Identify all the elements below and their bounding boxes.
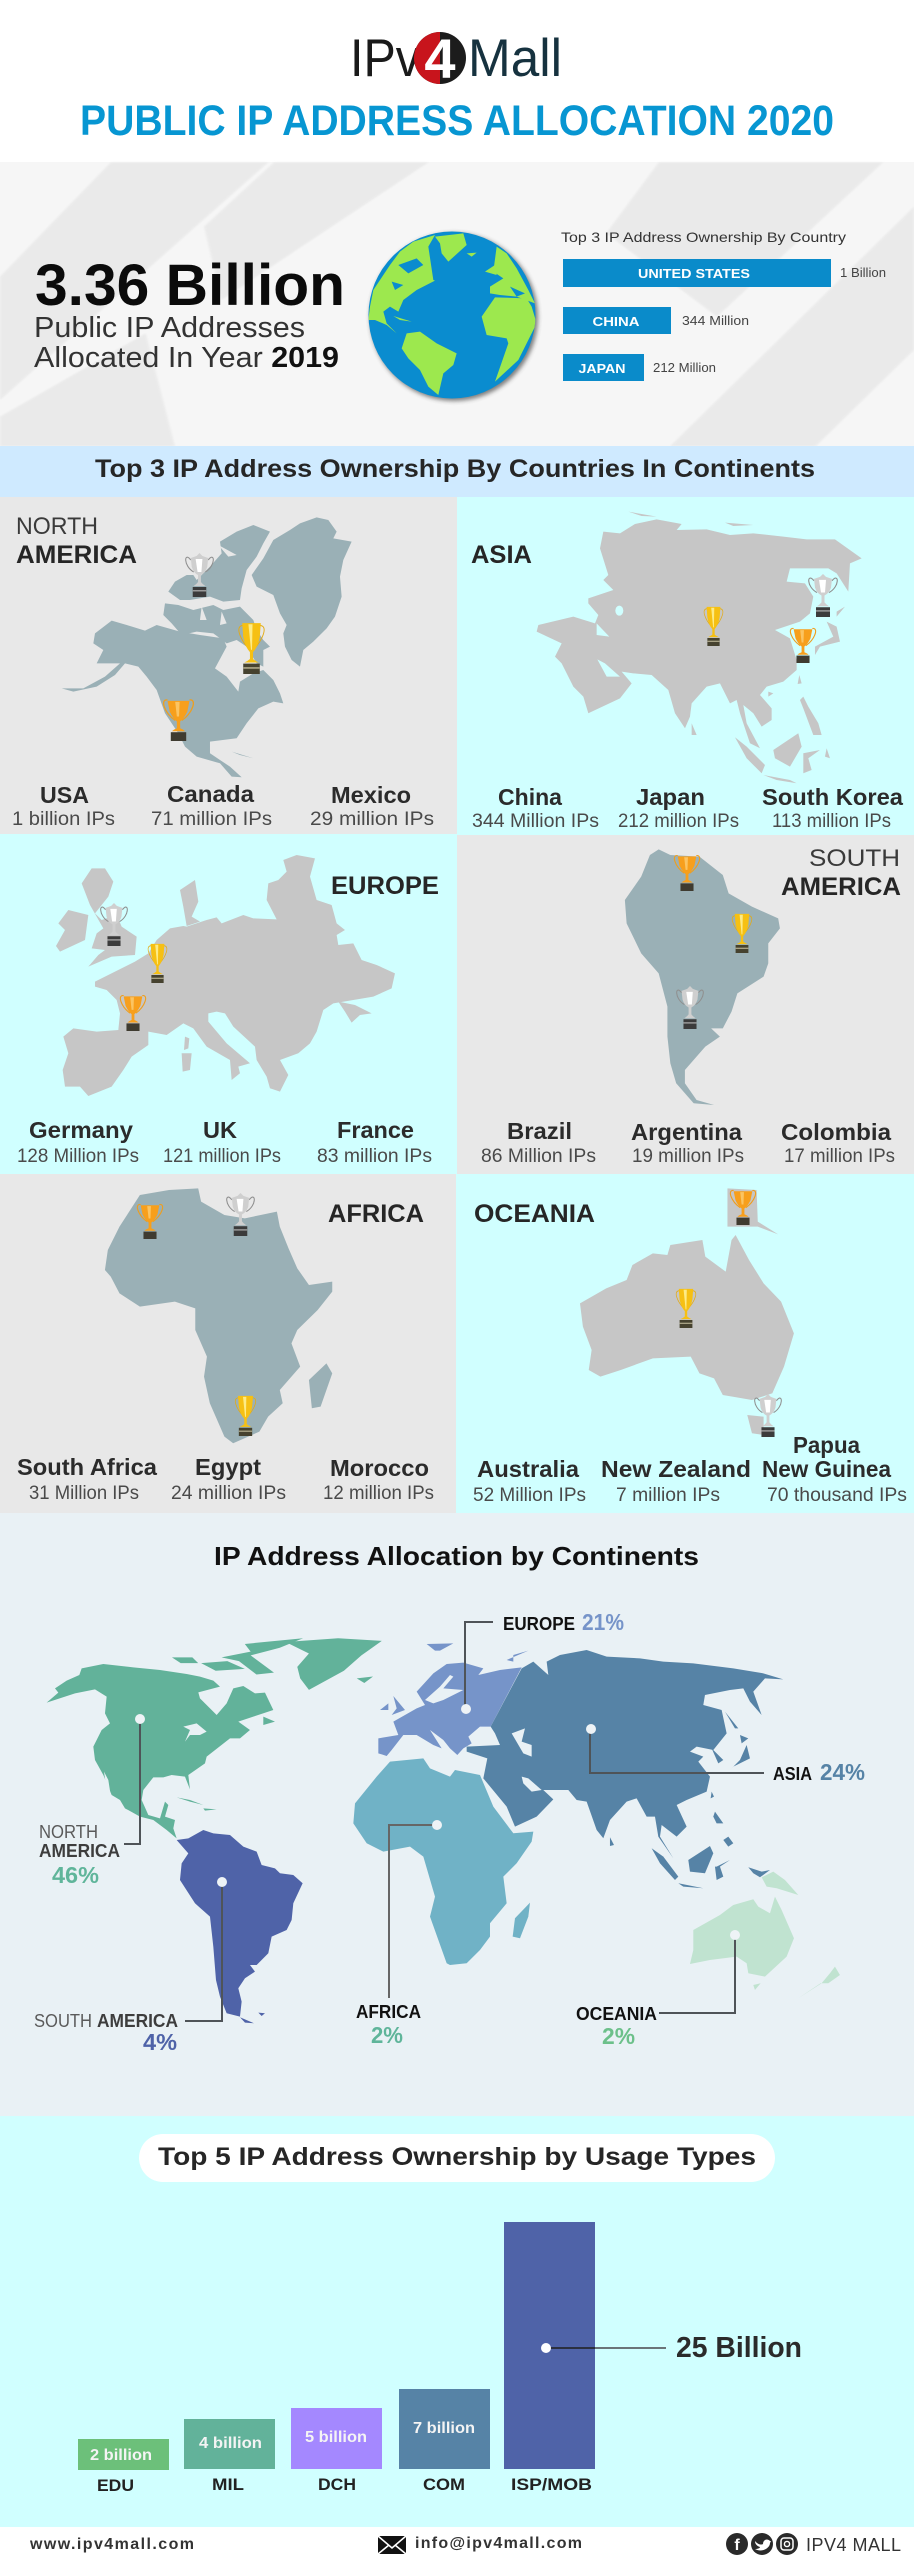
stat: China: China — [498, 784, 562, 810]
stat: Argentina: 19 million IPs — [632, 1146, 744, 1167]
stat: France — [317, 1117, 432, 1167]
big number: 3.36 Billion — [35, 253, 345, 318]
stat: South Korea: 113 million IPs — [772, 811, 891, 832]
bar: Japan: JAPAN — [578, 361, 626, 376]
stat: UK — [163, 1117, 281, 1167]
callout: Africa: 2% — [371, 2022, 403, 2048]
icons: social — [726, 2533, 798, 2555]
stat: Egypt: Egypt — [195, 1454, 261, 1480]
label: South America: SOUTH — [809, 845, 900, 872]
bar: EDU: 2 billion — [90, 2447, 152, 2464]
title: PUBLIC IP ADDRESS ALLOCATION 2020 — [80, 97, 834, 145]
bar: MIL: 4 billion — [199, 2435, 262, 2452]
callout: Europe: 21% — [582, 1609, 624, 1635]
icons: social: f — [734, 2537, 740, 2554]
stat: Australia: 52 Million IPs — [473, 1485, 586, 1506]
stat: Papua New Guinea: Papua — [793, 1432, 860, 1458]
trophies — [101, 903, 167, 1031]
bar: COM — [399, 2389, 490, 2494]
bar: United States — [563, 259, 886, 287]
label: North America: NORTH — [16, 513, 98, 540]
stat: Canada: 71 million IPs — [151, 809, 272, 830]
logo emblem: 4 — [424, 27, 456, 90]
map: Oceania — [580, 1188, 794, 1435]
email: info@ipv4mall.com — [415, 2535, 582, 2552]
bar: United States: UNITED STATES — [638, 266, 750, 281]
map: North America region — [47, 1638, 382, 1838]
panel: Africa — [0, 1174, 456, 1513]
stat: France: France — [337, 1117, 414, 1143]
stat: Argentina — [631, 1119, 744, 1167]
stat: Papua New Guinea: 70 thousand IPs — [767, 1485, 907, 1506]
callout: Oceania: 2% — [602, 2023, 635, 2049]
stat: South Africa: 31 Million IPs — [29, 1483, 139, 1504]
bar: DCH: 5 billion — [305, 2429, 367, 2446]
stat: Argentina: Argentina — [631, 1119, 742, 1145]
panel: North America — [0, 497, 457, 834]
stat: South Korea: South Korea — [762, 784, 903, 810]
callout: Oceania: OCEANIA — [576, 2004, 657, 2024]
stat: South Korea — [762, 784, 903, 832]
hero caption: Allocated In Year 2019 — [34, 342, 339, 374]
stat: Canada — [151, 781, 272, 830]
stat: Mexico: 29 million IPs — [310, 809, 434, 830]
icon: mail — [378, 2536, 406, 2554]
stat: Germany: Germany — [29, 1117, 133, 1143]
stat: Brazil: Brazil — [507, 1118, 572, 1144]
logo: IPv4Mall — [350, 27, 562, 90]
stat: Colombia — [781, 1119, 895, 1167]
stat: Germany — [17, 1117, 139, 1167]
stat: South Africa — [17, 1454, 157, 1504]
stat: Egypt — [171, 1454, 286, 1504]
heading band: continents: Top 3 IP Address Ownership By Countries In Continents — [95, 455, 815, 483]
heading band: continents — [0, 446, 914, 497]
trophies — [674, 855, 752, 1029]
bar: China — [563, 307, 749, 334]
label: Europe: EUROPE — [331, 872, 439, 900]
stat: Mexico: Mexico — [331, 782, 411, 808]
map: Africa — [105, 1188, 332, 1443]
brand handle: IPV4 MALL — [806, 2535, 901, 2555]
stat: Papua New Guinea — [762, 1432, 907, 1506]
callout: Europe: EUROPE — [503, 1614, 575, 1634]
bar: COM: COM — [423, 2475, 465, 2494]
stat: Japan: Japan — [636, 784, 705, 810]
bar: ISP/MOB — [504, 2222, 595, 2494]
hero caption: Public IP Addresses — [34, 312, 305, 344]
callout: Asia — [586, 1724, 865, 1785]
footer — [0, 2527, 914, 2560]
hero caption — [34, 312, 339, 374]
stat: China — [472, 784, 599, 832]
heading: usage types pill: Top 5 IP Address Ownership by Usage Types — [158, 2143, 756, 2171]
stat: Brazil: 86 Million IPs — [481, 1146, 596, 1167]
label: North America: AMERICA — [16, 541, 137, 569]
stat: Brazil — [481, 1118, 596, 1167]
map: Asia — [537, 512, 862, 783]
panel: South America — [457, 835, 914, 1174]
stat: UK: 121 million IPs — [163, 1146, 281, 1167]
bar: China: CHINA — [592, 314, 640, 329]
logo emblem — [414, 27, 466, 90]
world map — [47, 1638, 840, 2023]
callout: 25 billion — [541, 2332, 802, 2364]
bar: MIL: MIL — [212, 2475, 244, 2494]
stat: UK: UK — [203, 1117, 237, 1143]
callout: South America — [34, 1877, 227, 2055]
map: South America — [625, 849, 780, 1105]
bar: China: 344 Million — [682, 314, 749, 328]
bar: MIL — [184, 2419, 275, 2494]
panel: world allocation — [0, 1513, 914, 2116]
label: Oceania: OCEANIA — [474, 1200, 595, 1228]
trophies — [676, 1190, 781, 1437]
callout: North America: NORTH — [39, 1822, 98, 1842]
bar: DCH — [291, 2408, 382, 2494]
stat: Colombia: Colombia — [781, 1119, 891, 1145]
stat: Japan — [618, 784, 739, 832]
map: Asia region — [467, 1650, 783, 1888]
stat: USA: 1 billion IPs — [12, 809, 115, 830]
label: North America — [16, 513, 137, 569]
stat: Morocco — [323, 1455, 434, 1504]
stat: New Zealand — [601, 1456, 751, 1506]
callout: South America: AMERICA — [97, 2011, 178, 2031]
stat: Papua New Guinea: New Guinea — [762, 1456, 891, 1482]
callout: Africa — [356, 1820, 442, 2048]
callout: South America: 4% — [143, 2029, 177, 2055]
bar: United States: 1 Billion — [840, 266, 886, 280]
stat: Mexico — [310, 782, 434, 830]
chart heading: Top 3 IP Address Ownership By Country — [561, 229, 846, 245]
callout: North America — [39, 1714, 145, 1888]
heading: allocation: IP Address Allocation by Continents — [214, 1541, 699, 1571]
callout: North America: 46% — [52, 1862, 99, 1888]
panel: Oceania — [456, 1174, 914, 1513]
label: South America: AMERICA — [781, 873, 901, 901]
panel: Europe — [0, 834, 457, 1174]
website: www.ipv4mall.com — [29, 2536, 194, 2553]
callout: North America: AMERICA — [39, 1841, 120, 1861]
callout: Oceania — [576, 1930, 740, 2049]
label: South America — [781, 845, 901, 901]
stat: USA: USA — [40, 782, 89, 808]
logo text left: IPv — [350, 29, 420, 88]
bar: Japan — [563, 354, 716, 381]
stat: Australia — [473, 1456, 586, 1506]
stat: Egypt: 24 million IPs — [171, 1483, 286, 1504]
logo text right: Mall — [468, 29, 562, 88]
bar: ISP/MOB: ISP/MOB — [511, 2475, 592, 2494]
callout: Africa: AFRICA — [356, 2002, 421, 2022]
ownership chart — [561, 229, 886, 381]
hero background — [0, 162, 914, 446]
bar: EDU — [78, 2439, 169, 2495]
stat: Morocco: 12 million IPs — [323, 1483, 434, 1504]
map: North America — [62, 517, 352, 777]
callout: Asia: 24% — [820, 1759, 865, 1785]
callout: Europe — [461, 1609, 624, 1714]
stat: Australia: Australia — [477, 1456, 579, 1482]
stat: France: 83 million IPs — [317, 1146, 432, 1167]
map: South America region — [177, 1830, 303, 2023]
label: Africa: AFRICA — [328, 1200, 424, 1228]
stat: Colombia: 17 million IPs — [784, 1146, 895, 1167]
trophies — [137, 1193, 256, 1436]
map: Europe region — [378, 1643, 528, 1756]
bar: DCH: DCH — [318, 2475, 356, 2494]
stat: Canada: Canada — [167, 781, 254, 807]
callout: Asia: ASIA — [773, 1764, 812, 1784]
stat: Germany: 128 Million IPs — [17, 1146, 139, 1167]
panel: usage types — [0, 2116, 914, 2527]
trophies — [164, 553, 264, 741]
icon: globe — [368, 232, 538, 401]
bar: Japan: 212 Million — [653, 361, 716, 375]
callout: 25 billion: 25 Billion — [676, 2332, 802, 2364]
panel: hero summary — [0, 162, 914, 446]
stat: New Zealand: New Zealand — [601, 1456, 751, 1482]
stat: Japan: 212 million IPs — [618, 811, 739, 832]
map: Oceania region — [690, 1872, 840, 1998]
stat: China: 344 Million IPs — [472, 811, 599, 832]
stat: South Africa: South Africa — [17, 1454, 157, 1480]
panel: Asia — [457, 497, 914, 835]
stat: Morocco: Morocco — [330, 1455, 429, 1481]
map: Europe — [56, 855, 395, 1096]
heading: usage types pill — [139, 2134, 775, 2182]
callout: South America: SOUTH — [34, 2011, 92, 2031]
label: Asia: ASIA — [471, 541, 532, 569]
bar: COM: 7 billion — [413, 2420, 475, 2437]
bar: EDU: EDU — [97, 2476, 134, 2495]
stat: USA — [12, 782, 115, 830]
stat: New Zealand: 7 million IPs — [616, 1485, 720, 1506]
trophies — [704, 574, 837, 663]
map: Africa region — [353, 1758, 533, 1965]
